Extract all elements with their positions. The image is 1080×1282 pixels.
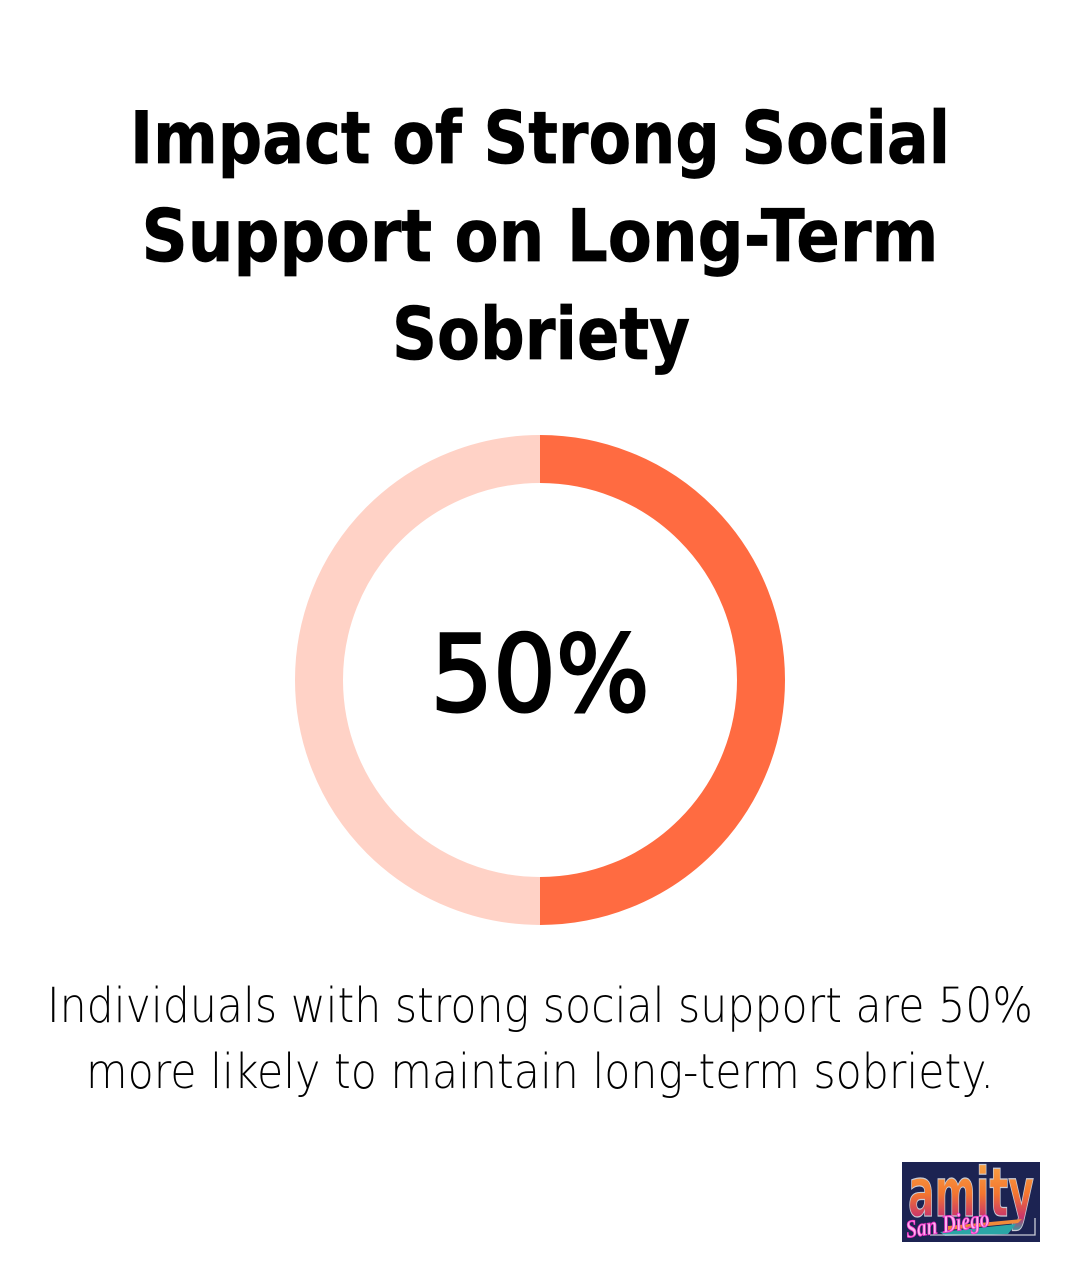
title [130, 96, 950, 376]
donut chart: 50% [319, 459, 761, 901]
logo background [902, 1162, 1040, 1242]
logo beach stripes [940, 1219, 1022, 1236]
description text: more likely to maintain long-term sobriety. [86, 1044, 994, 1100]
logo script: San Diego [904, 1205, 991, 1244]
donut value arc [540, 459, 761, 901]
title: Sobriety [392, 292, 690, 376]
title: Support on Long-Term [142, 194, 938, 278]
donut track [319, 459, 540, 901]
donut center value: 50% [430, 614, 650, 736]
description text [47, 978, 1033, 1100]
logo: Amity San Diego [902, 1154, 1040, 1244]
title: Impact of Strong Social [130, 96, 950, 180]
logo outline [930, 1218, 1035, 1235]
